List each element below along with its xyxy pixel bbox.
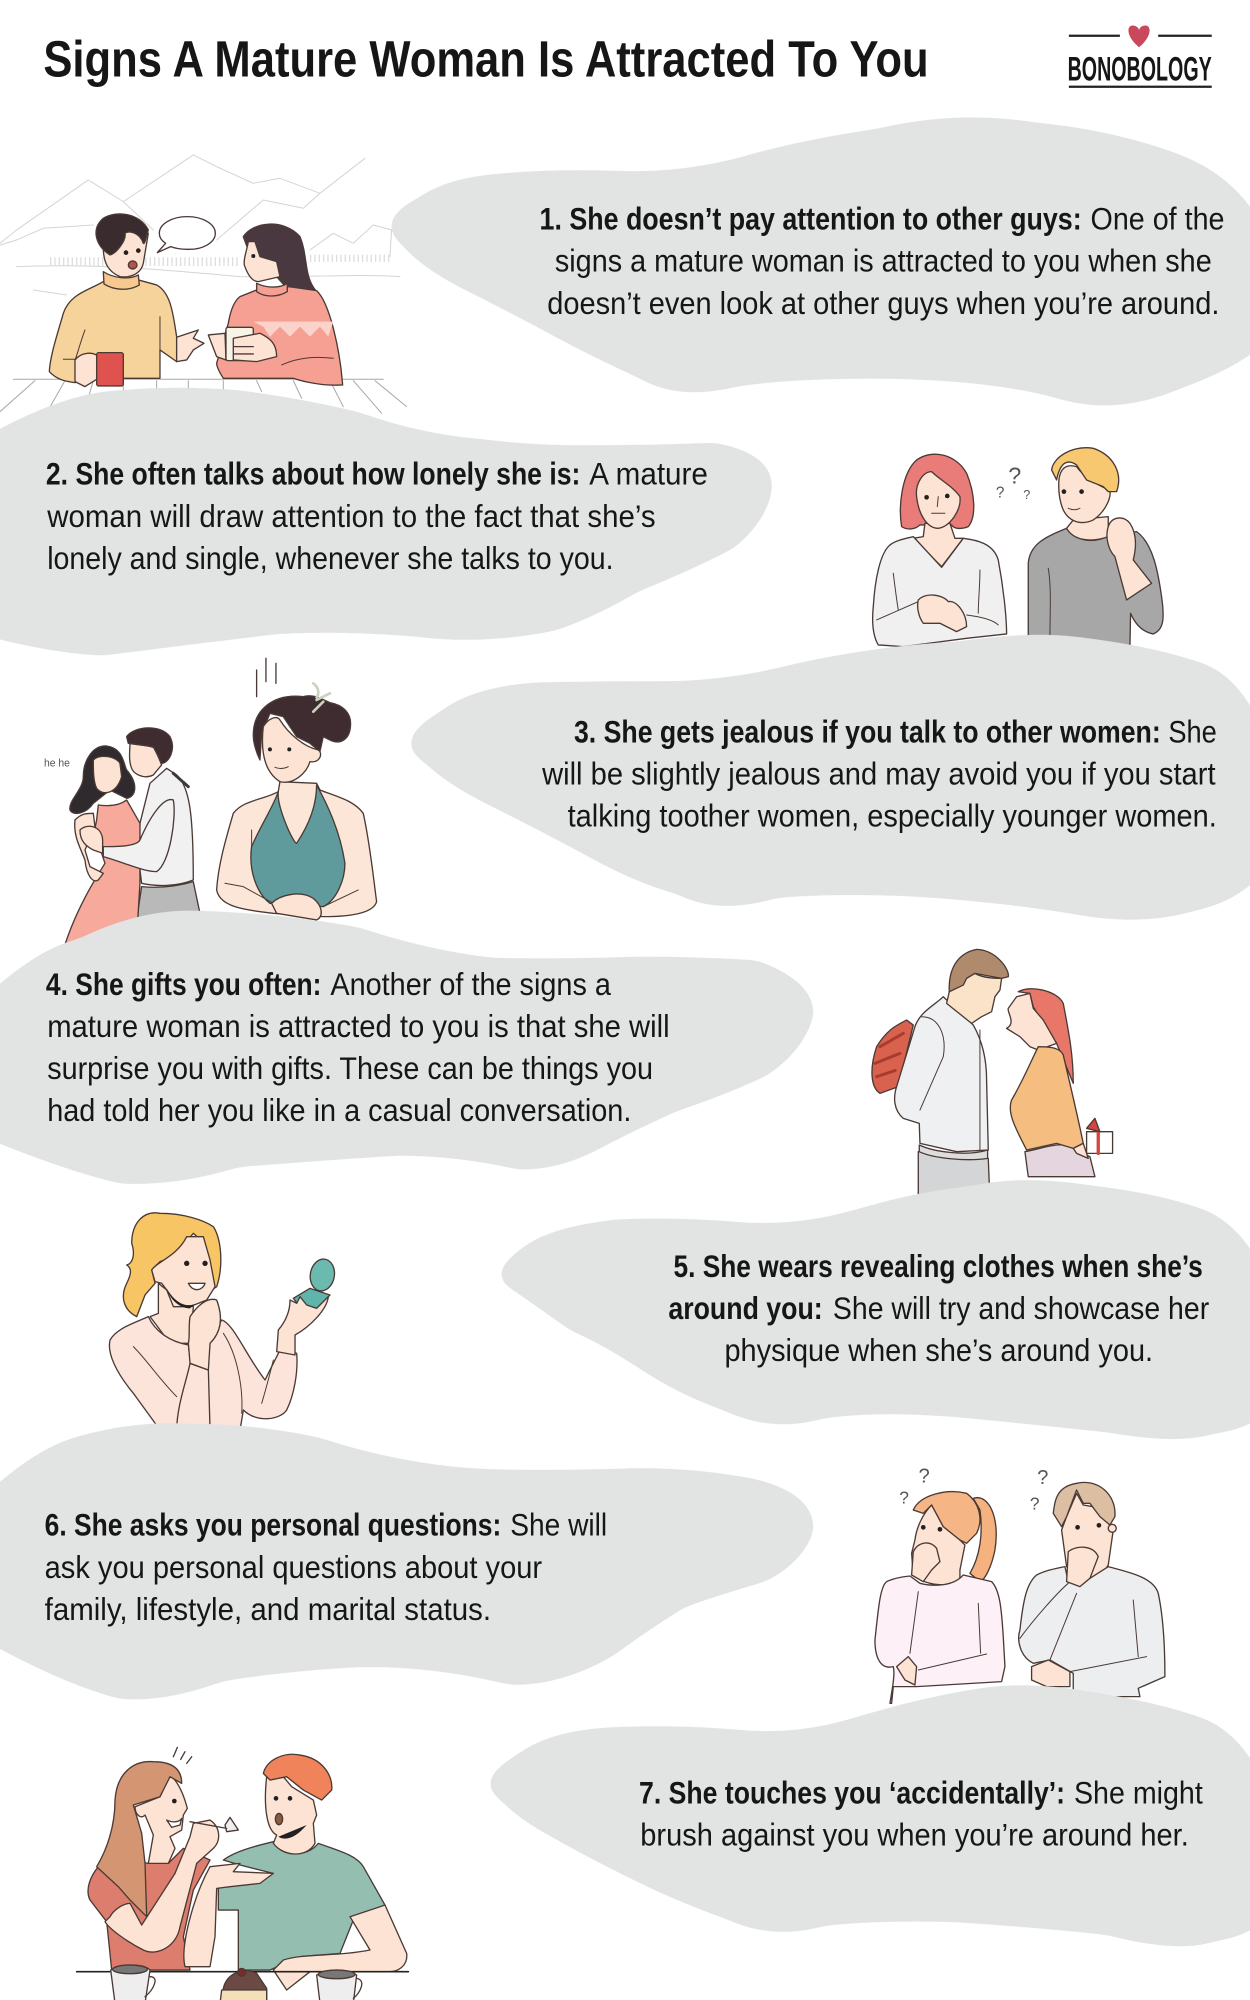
text: 2. She often talks about how lonely she is: — [46, 457, 580, 492]
question marks — [996, 462, 1030, 502]
man with blond hair — [1028, 528, 1163, 648]
text: She will try and showcase her — [833, 1291, 1209, 1326]
text — [45, 1508, 607, 1627]
woman in orange top — [1018, 989, 1073, 1083]
white mug and hands — [208, 333, 226, 360]
question marks: ? — [1008, 462, 1021, 488]
illustration 6: two people thinking — [875, 1466, 1165, 1703]
question marks: ? — [899, 1487, 909, 1507]
man in white shirt — [137, 882, 200, 920]
text: woman will draw attention to the fact that she’s — [46, 499, 656, 534]
text — [541, 714, 1217, 834]
question marks — [899, 1466, 1048, 1513]
text: mature woman is attracted to you is that she will — [47, 1009, 670, 1044]
panel: sign 1 — [390, 117, 1250, 406]
man in teal shirt — [218, 1842, 385, 1970]
man in shirt — [918, 1152, 990, 1200]
hair leaves — [313, 683, 330, 712]
text — [668, 1249, 1209, 1368]
text — [639, 1776, 1203, 1853]
blob — [0, 1423, 814, 1700]
text: She will — [510, 1508, 607, 1543]
panel: sign 3 — [410, 635, 1250, 920]
woman in pink sweater — [243, 224, 317, 292]
illustration 2: confused couple — [873, 448, 1163, 648]
question marks: ? — [1037, 1467, 1048, 1489]
panel: sign 4 — [0, 911, 814, 1184]
question marks: ? — [1023, 488, 1030, 502]
blob — [410, 635, 1250, 920]
question marks: ? — [996, 484, 1004, 501]
question marks: ? — [919, 1466, 930, 1488]
sad woman in teal dress — [217, 782, 377, 917]
top — [109, 1317, 297, 1430]
text: 6. She asks you personal questions: — [45, 1508, 501, 1543]
text: 4. She gifts you often: — [46, 967, 321, 1002]
text: One of the — [1091, 202, 1224, 237]
blob — [489, 1685, 1250, 1946]
text: 1. She doesn’t pay attention to other guys: — [540, 202, 1082, 237]
text: talking toother women, especially younger women. — [568, 799, 1217, 834]
blob — [500, 1180, 1250, 1439]
question marks: ? — [1030, 1493, 1040, 1513]
text: A mature — [589, 457, 708, 492]
man in pale grey top — [1062, 1493, 1113, 1582]
man in yellow sweater — [49, 280, 177, 383]
text: 3. She gets jealous if you talk to other women: — [574, 714, 1161, 749]
woman in pale pink top — [970, 1498, 996, 1582]
illustration 3: jealous woman watching couple — [44, 658, 377, 950]
blob — [390, 117, 1250, 406]
panel: sign 6 — [0, 1423, 814, 1700]
text: signs a mature woman is attracted to you when she — [555, 244, 1212, 279]
text: brush against you when you’re around her. — [640, 1818, 1189, 1853]
text: She — [1168, 714, 1217, 749]
logo: Bonobology — [1068, 26, 1212, 88]
text: will be slightly jealous and may avoid you if you start — [541, 756, 1216, 791]
woman in coral top — [88, 1848, 210, 1970]
text: surprise you with gifts. These can be things you — [47, 1051, 653, 1086]
text — [46, 457, 708, 576]
title: Signs A Mature Woman Is Attracted To You — [43, 31, 929, 88]
text: She might — [1074, 1776, 1203, 1811]
text: Another of the signs a — [330, 967, 612, 1002]
text: doesn’t even look at other guys when you’re around. — [547, 286, 1219, 321]
text: lonely and single, whenever she talks to you. — [47, 541, 614, 576]
panel: sign 5 — [500, 1180, 1250, 1439]
woman in pink dress — [70, 746, 135, 813]
blob — [0, 388, 772, 656]
mirror — [293, 1288, 330, 1312]
panel: sign 7 — [489, 1685, 1250, 1946]
red mug — [97, 353, 123, 386]
text: 7. She touches you ‘accidentally’: — [639, 1776, 1065, 1811]
text — [540, 202, 1224, 321]
text: had told her you like in a casual conversation. — [47, 1093, 631, 1128]
gift box — [1087, 1132, 1113, 1153]
illustration 4: man with bouquet and woman with gift — [872, 949, 1113, 1200]
hehe label: he he — [44, 758, 70, 770]
illustration 7: woman feeding man cake — [77, 1747, 408, 2000]
text: family, lifestyle, and marital status. — [45, 1592, 491, 1627]
speech bubble — [157, 217, 215, 253]
blob — [0, 911, 814, 1184]
icon: heart — [1128, 26, 1150, 47]
text: physique when she’s around you. — [724, 1333, 1153, 1368]
text: around you: — [668, 1291, 823, 1326]
spoon — [190, 1817, 238, 1832]
text: ask you personal questions about your — [45, 1550, 542, 1585]
panel: sign 2 — [0, 388, 772, 656]
woman with pink hair — [900, 454, 974, 529]
text — [46, 967, 670, 1128]
bouquet — [872, 1020, 913, 1093]
illustration 1: couple talking over mugs — [0, 155, 407, 422]
illustration 5: woman applying lipstick with mirror — [109, 1213, 337, 1430]
table, cups and cake — [77, 1969, 408, 1974]
